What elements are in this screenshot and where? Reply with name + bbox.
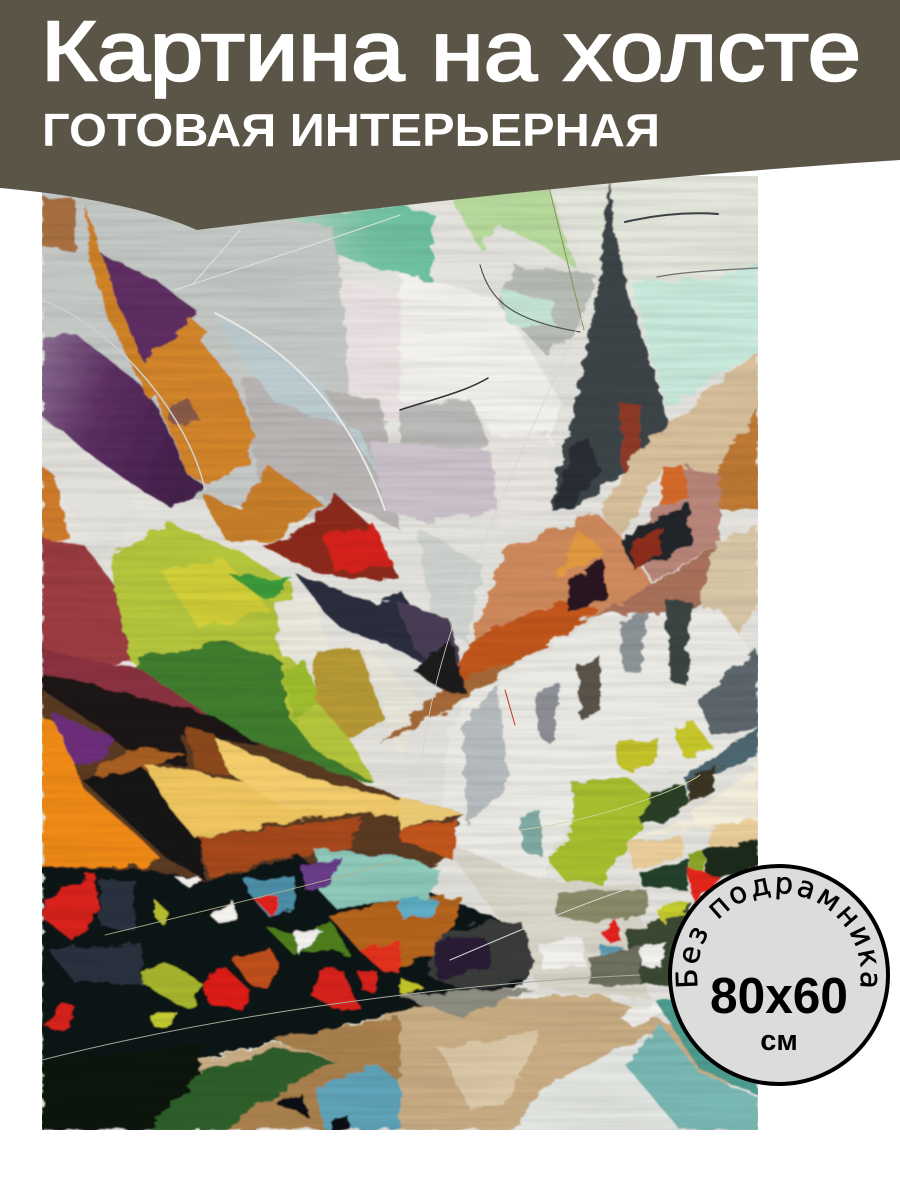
- palette knife scratch lines: [42, 183, 758, 1060]
- white walls: [440, 600, 758, 880]
- dark stroke centre: [294, 572, 462, 669]
- badge unit: см: [760, 1025, 798, 1057]
- green foliage left: [109, 523, 375, 783]
- subtitle: ГОТОВАЯ ИНТЕРЬЕРНАЯ: [42, 104, 660, 156]
- green bush right: [550, 720, 713, 883]
- badge curved text: Без подрамника: [675, 876, 878, 986]
- street centre: [440, 840, 690, 1000]
- badge size: 80x60: [710, 967, 848, 1024]
- header banner: [0, 0, 900, 230]
- left white and terracotta: [42, 422, 132, 666]
- flower market: [42, 846, 536, 1060]
- dormer windows: [557, 466, 690, 613]
- red brush centre: [262, 493, 400, 580]
- white highlight and yellow strokes: [273, 597, 417, 740]
- awnings left: [42, 650, 463, 885]
- size badge: [668, 864, 890, 1086]
- dark wedge under roof tip: [413, 640, 467, 693]
- brush streak texture: [42, 176, 758, 1130]
- church spire: [550, 179, 670, 509]
- left top brown patch: [42, 196, 75, 252]
- orange strokes left: [85, 203, 322, 543]
- awning right: [627, 727, 758, 903]
- painting: abstract town street: [42, 176, 758, 1130]
- church roof: [380, 349, 758, 745]
- title: Картина на холсте: [41, 4, 861, 98]
- foreground reflections: [42, 987, 758, 1130]
- sky: pale paint strokes: [42, 176, 758, 643]
- purple strokes left: [42, 253, 205, 509]
